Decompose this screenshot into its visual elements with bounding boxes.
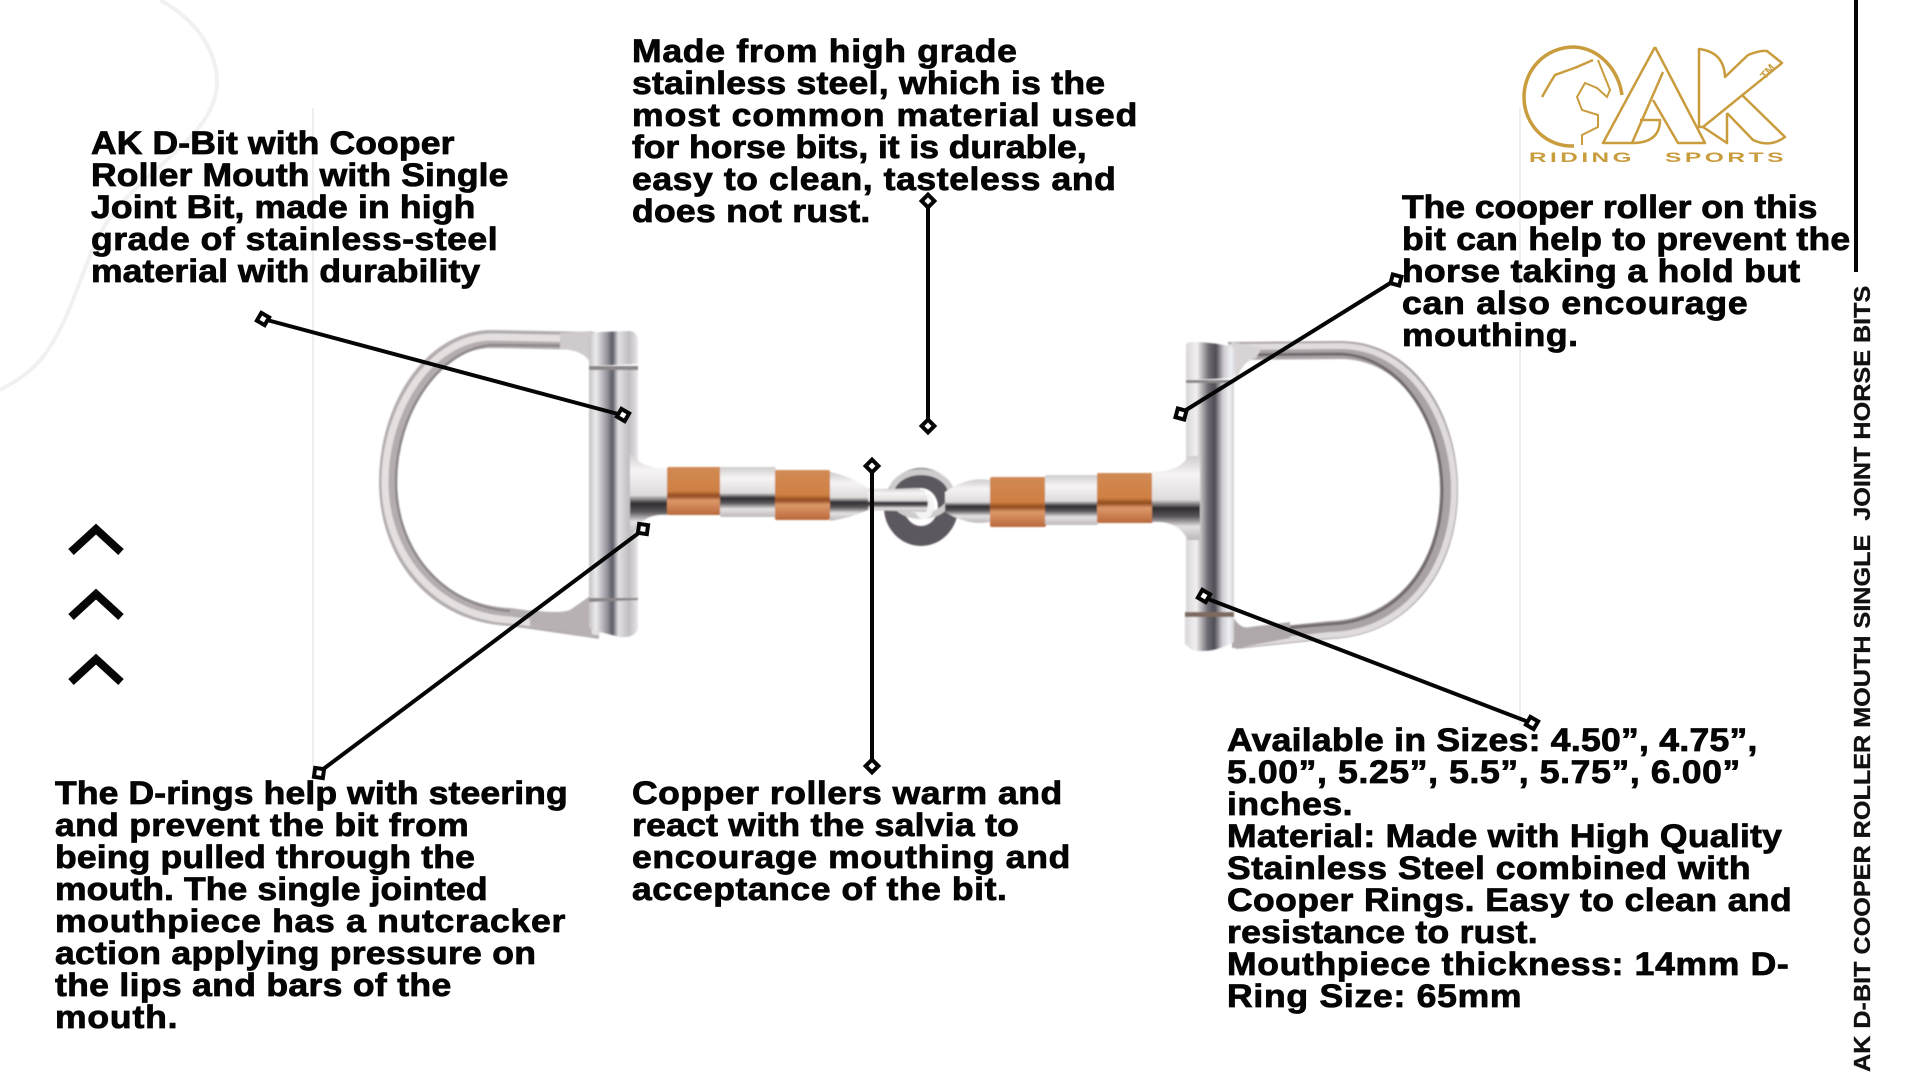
product photo: D-bit with copper rollers (385, 331, 1454, 651)
decorative background curve (0, 0, 217, 390)
callout line: copper rollers (866, 460, 878, 772)
text: D-rings: the lips and bars of the (55, 967, 452, 1003)
left mouthpiece (630, 452, 925, 535)
text: D-rings: mouthpiece has a nutcracker (55, 903, 566, 939)
text: copper rollers (632, 775, 1071, 907)
text: D-rings: mouth. The single jointed (55, 871, 488, 907)
text: stainless steel: most common material used (632, 97, 1138, 133)
callout line: product description to cheek bar (257, 313, 629, 421)
text: sizes and material: Mouthpiece thickness: 14mm D- (1227, 946, 1789, 982)
text: sizes and material: resistance to rust. (1227, 914, 1538, 950)
text: sizes and material: inches. (1227, 786, 1353, 822)
text: cooper roller: horse taking a hold but (1402, 253, 1800, 289)
left cheek bar (589, 331, 638, 637)
text: D-rings: The D-rings help with steering (55, 775, 568, 811)
text: copper rollers: encourage mouthing and (632, 839, 1071, 875)
logo circle and horse (1524, 47, 1622, 146)
text: stainless steel: does not rust. (632, 193, 871, 229)
text: sizes and material: Cooper Rings. Easy to clean and (1227, 882, 1792, 918)
text: stainless steel: easy to clean, tasteless and (632, 161, 1116, 197)
text: product description: Roller Mouth with Single (91, 157, 509, 193)
text: copper rollers: react with the salvia to (632, 807, 1019, 843)
text: sizes and material: Stainless Steel combined with (1227, 850, 1751, 886)
chevron arrows (71, 529, 121, 682)
text: D-rings: mouth. (55, 999, 178, 1035)
text: product description: Joint Bit, made in high (91, 189, 475, 225)
right vertical rule (1854, 0, 1858, 272)
text: stainless steel: stainless steel, which is the (632, 65, 1105, 101)
text: D-rings: action applying pressure on (55, 935, 536, 971)
text: stainless steel (632, 33, 1138, 229)
text: product description: grade of stainless-steel (91, 221, 498, 257)
right mouthpiece (945, 456, 1200, 540)
text: cooper roller: The cooper roller on this (1402, 189, 1817, 225)
text: stainless steel: for horse bits, it is durable, (632, 129, 1087, 165)
text: sizes and material: 5.00”, 5.25”, 5.5”, 5.75”, 6.00” (1227, 754, 1741, 790)
text: stainless steel: Made from high grade (632, 33, 1018, 69)
text: D-rings (54, 775, 568, 1035)
text: sizes and material: Available in Sizes: 4.50”, 4.75”, (1227, 722, 1758, 758)
text: product description (91, 125, 509, 289)
text: cooper roller (1402, 189, 1850, 353)
right cheek bar (1185, 342, 1236, 651)
text: sizes and material (1227, 722, 1792, 1014)
logo letters A and K (1603, 47, 1785, 143)
left guide line (312, 108, 314, 774)
text: sizes and material: Material: Made with High Quality (1227, 818, 1782, 854)
callout line: stainless steel (922, 195, 934, 432)
logo word: riding: RIDING (1529, 149, 1635, 165)
logo: OAK Riding Sports (1524, 47, 1787, 165)
text: cooper roller: mouthing. (1402, 317, 1579, 353)
text: D-rings: being pulled through the (55, 839, 475, 875)
centre joint ring (868, 472, 951, 536)
callout line: D-rings (314, 524, 648, 778)
vertical title: AK D-BIT COOPER ROLLER MOUTH SINGLE JOINT HORSE BITS (1849, 286, 1875, 1072)
callout line: sizes (1198, 590, 1538, 729)
logo trademark: TM (1758, 62, 1778, 82)
text: product description: AK D-Bit with Cooper (91, 125, 455, 161)
left D-ring (385, 331, 600, 638)
right D-ring (1228, 342, 1454, 648)
text: copper rollers: acceptance of the bit. (632, 871, 1007, 907)
logo word: sports: SPORTS (1665, 149, 1787, 165)
text: cooper roller: can also encourage (1402, 285, 1748, 321)
text: sizes and material: Ring Size: 65mm (1227, 978, 1522, 1014)
text: product description: material with durability (91, 253, 480, 289)
text: cooper roller: bit can help to prevent the (1402, 221, 1850, 257)
callout line: cooper roller (1175, 274, 1402, 420)
right guide line (1519, 108, 1521, 725)
text: D-rings: and prevent the bit from (55, 807, 469, 843)
text: copper rollers: Copper rollers warm and (632, 775, 1063, 811)
